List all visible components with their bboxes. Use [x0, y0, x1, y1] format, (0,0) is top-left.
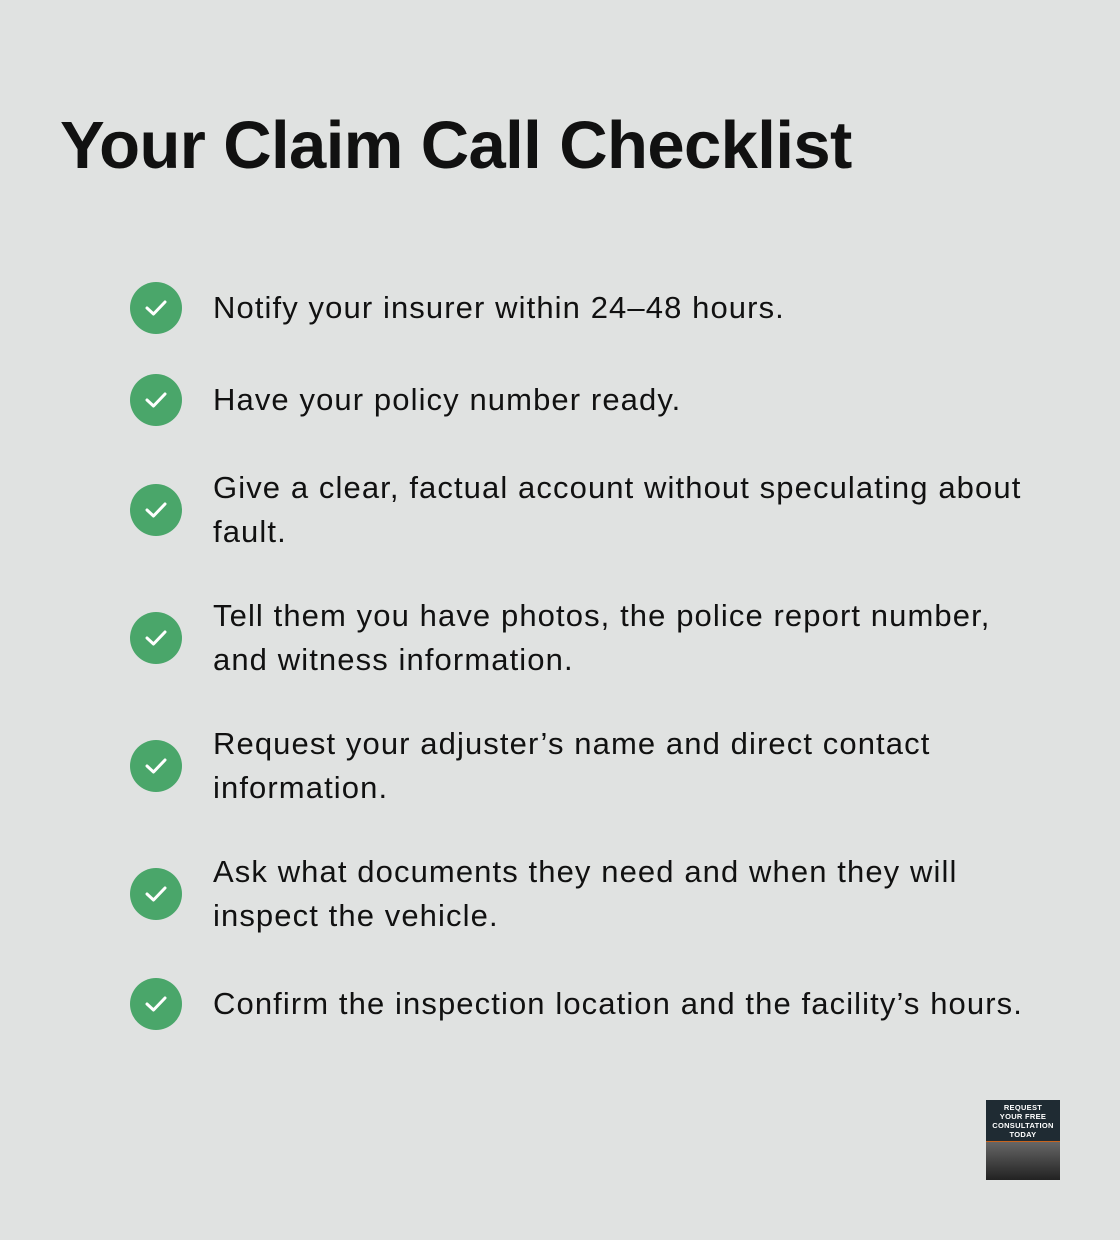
- logo: consultation badge: REQUEST: [1004, 1103, 1042, 1112]
- logo: consultation badge: YOUR FREE: [1000, 1112, 1046, 1121]
- icon: check: [130, 868, 182, 920]
- text: and witness information.: [213, 642, 574, 677]
- text: Give a clear, factual account without speculating about: [213, 470, 1021, 505]
- icon: check: [130, 978, 182, 1030]
- text: inspect the vehicle.: [213, 898, 499, 933]
- icon: check: [130, 282, 182, 334]
- item 4: [130, 598, 991, 677]
- text: Notify your insurer within 24–48 hours.: [213, 290, 785, 325]
- logo: consultation badge: CONSULTATION: [992, 1121, 1054, 1130]
- text: [213, 726, 930, 805]
- title: Your Claim Call Checklist: [60, 108, 852, 183]
- text: Request your adjuster’s name and direct contact: [213, 726, 930, 761]
- item 2: [130, 374, 681, 426]
- item 1: [130, 282, 785, 334]
- text: [213, 470, 1021, 549]
- icon: check: [130, 612, 182, 664]
- text: Confirm the inspection location and the facility’s hours.: [213, 986, 1023, 1021]
- item 3: [130, 470, 1021, 549]
- item 5: [130, 726, 930, 805]
- text: information.: [213, 770, 388, 805]
- text: Have your policy number ready.: [213, 382, 681, 417]
- logo: consultation badge: TODAY: [1010, 1130, 1036, 1139]
- icon: check: [130, 484, 182, 536]
- item 6: [130, 854, 957, 933]
- item 7: [130, 978, 1023, 1030]
- logo: consultation badge: [986, 1100, 1060, 1180]
- icon: check: [130, 374, 182, 426]
- icon: check: [130, 740, 182, 792]
- text: Ask what documents they need and when they will: [213, 854, 957, 889]
- text: [213, 598, 991, 677]
- text: fault.: [213, 514, 287, 549]
- text: Tell them you have photos, the police report number,: [213, 598, 991, 633]
- text: [213, 854, 957, 933]
